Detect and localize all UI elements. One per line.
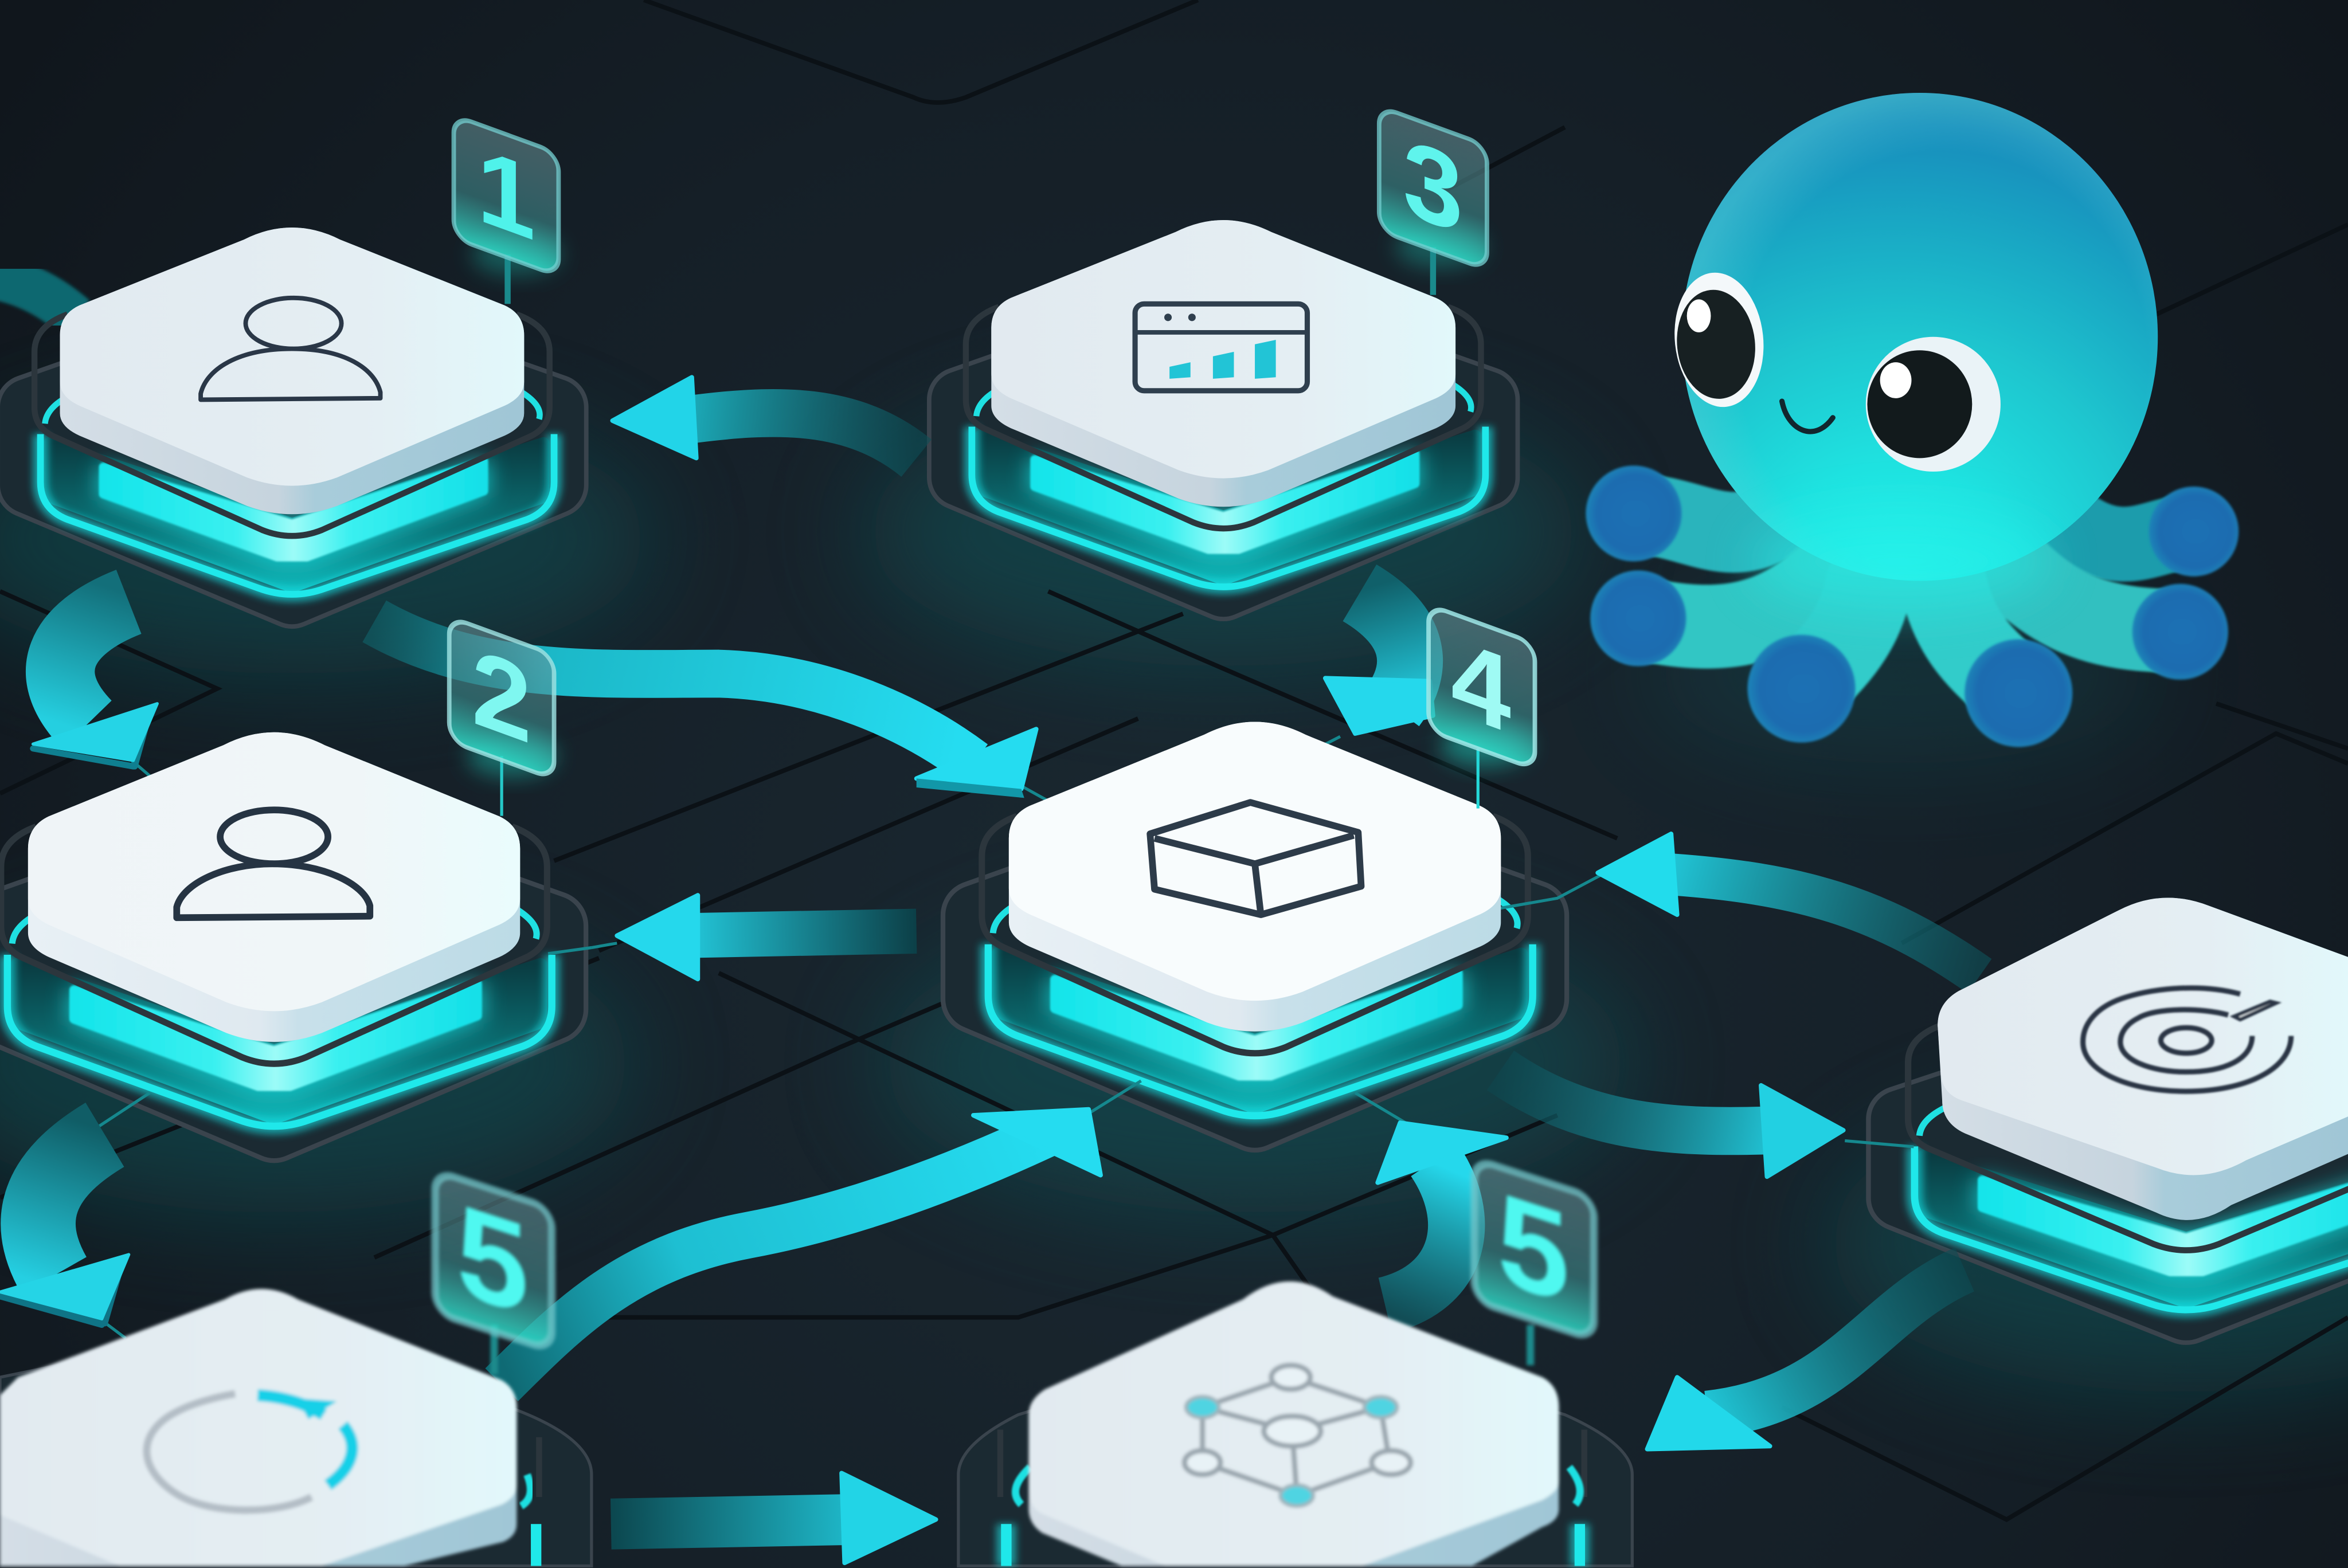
tag 2 [449,617,557,816]
arrow: node 1 to node 4 [374,621,1036,798]
octopus mascot [1586,93,2239,747]
node 2: person [28,732,520,1042]
tag 5 right [1474,1157,1594,1365]
icon: browser chart [1135,304,1307,391]
front tentacle tips [1590,570,2228,747]
node 5 right: network cube [1029,1281,1559,1566]
back tentacle tips [1586,465,2239,577]
arrow: node 6 to node 4 [1598,834,1979,976]
node 4: cube [1009,722,1501,1032]
node base 3 [960,307,1487,589]
connector lines [93,736,1913,1338]
tag 4 [1429,605,1535,809]
node 6: target [1938,897,2348,1220]
number 1: 1 [477,125,535,264]
head [1682,93,2158,581]
teal haze beneath the nodes [0,397,2348,1392]
tag 1 [454,115,562,304]
icon: network cube [1184,1365,1411,1506]
arrow: node 5 left to node 4 [502,1110,1101,1385]
front tentacles [1638,562,2180,693]
arrow: node 2 to node 5 left [0,1135,129,1325]
tag 5 left [435,1169,552,1374]
node base 5 right [958,1332,1632,1566]
number 3: 3 [1403,115,1463,257]
node base 6 [1901,1024,2348,1311]
back tentacles [1634,513,2194,544]
node 3: dashboard [991,220,1455,507]
right eye [1866,337,2001,472]
node 1: person [60,228,524,514]
icon: person [177,810,370,918]
number 5: 5 [457,1175,529,1343]
octopus floor glow [1647,584,2157,763]
number 2: 2 [472,625,531,767]
icon: target [2083,988,2291,1091]
arrow: node 5 right to node 4 [1378,1123,1506,1306]
arrow: node 1 to node 2 [33,602,157,766]
left eye [1668,268,1770,411]
icon: person [201,298,381,399]
icon: cycle [147,1394,352,1510]
arrow: node 6 to node 5 right [1647,1269,1965,1449]
arrow: fragment at top left [0,277,75,317]
arrow: node 5 left to node 5 right [611,1473,936,1563]
arrow: node 3 to node 4 [1325,593,1433,734]
tag 3 [1379,106,1487,295]
smile [1782,401,1833,432]
arrow: node 4 to node 6 [1500,1071,1844,1177]
node base 5 left [0,1325,592,1566]
node base 1 [29,315,555,596]
number 5: 5 [1497,1164,1569,1331]
node base 4 [976,816,1534,1118]
arrow: node 4 to node 2 [617,895,917,979]
node 5 left: cycle [0,1289,516,1566]
number 4: 4 [1451,614,1511,757]
node base 2 [0,826,553,1128]
icon: cube [1150,802,1361,915]
arrow: node 3 to node 1 [612,377,917,458]
